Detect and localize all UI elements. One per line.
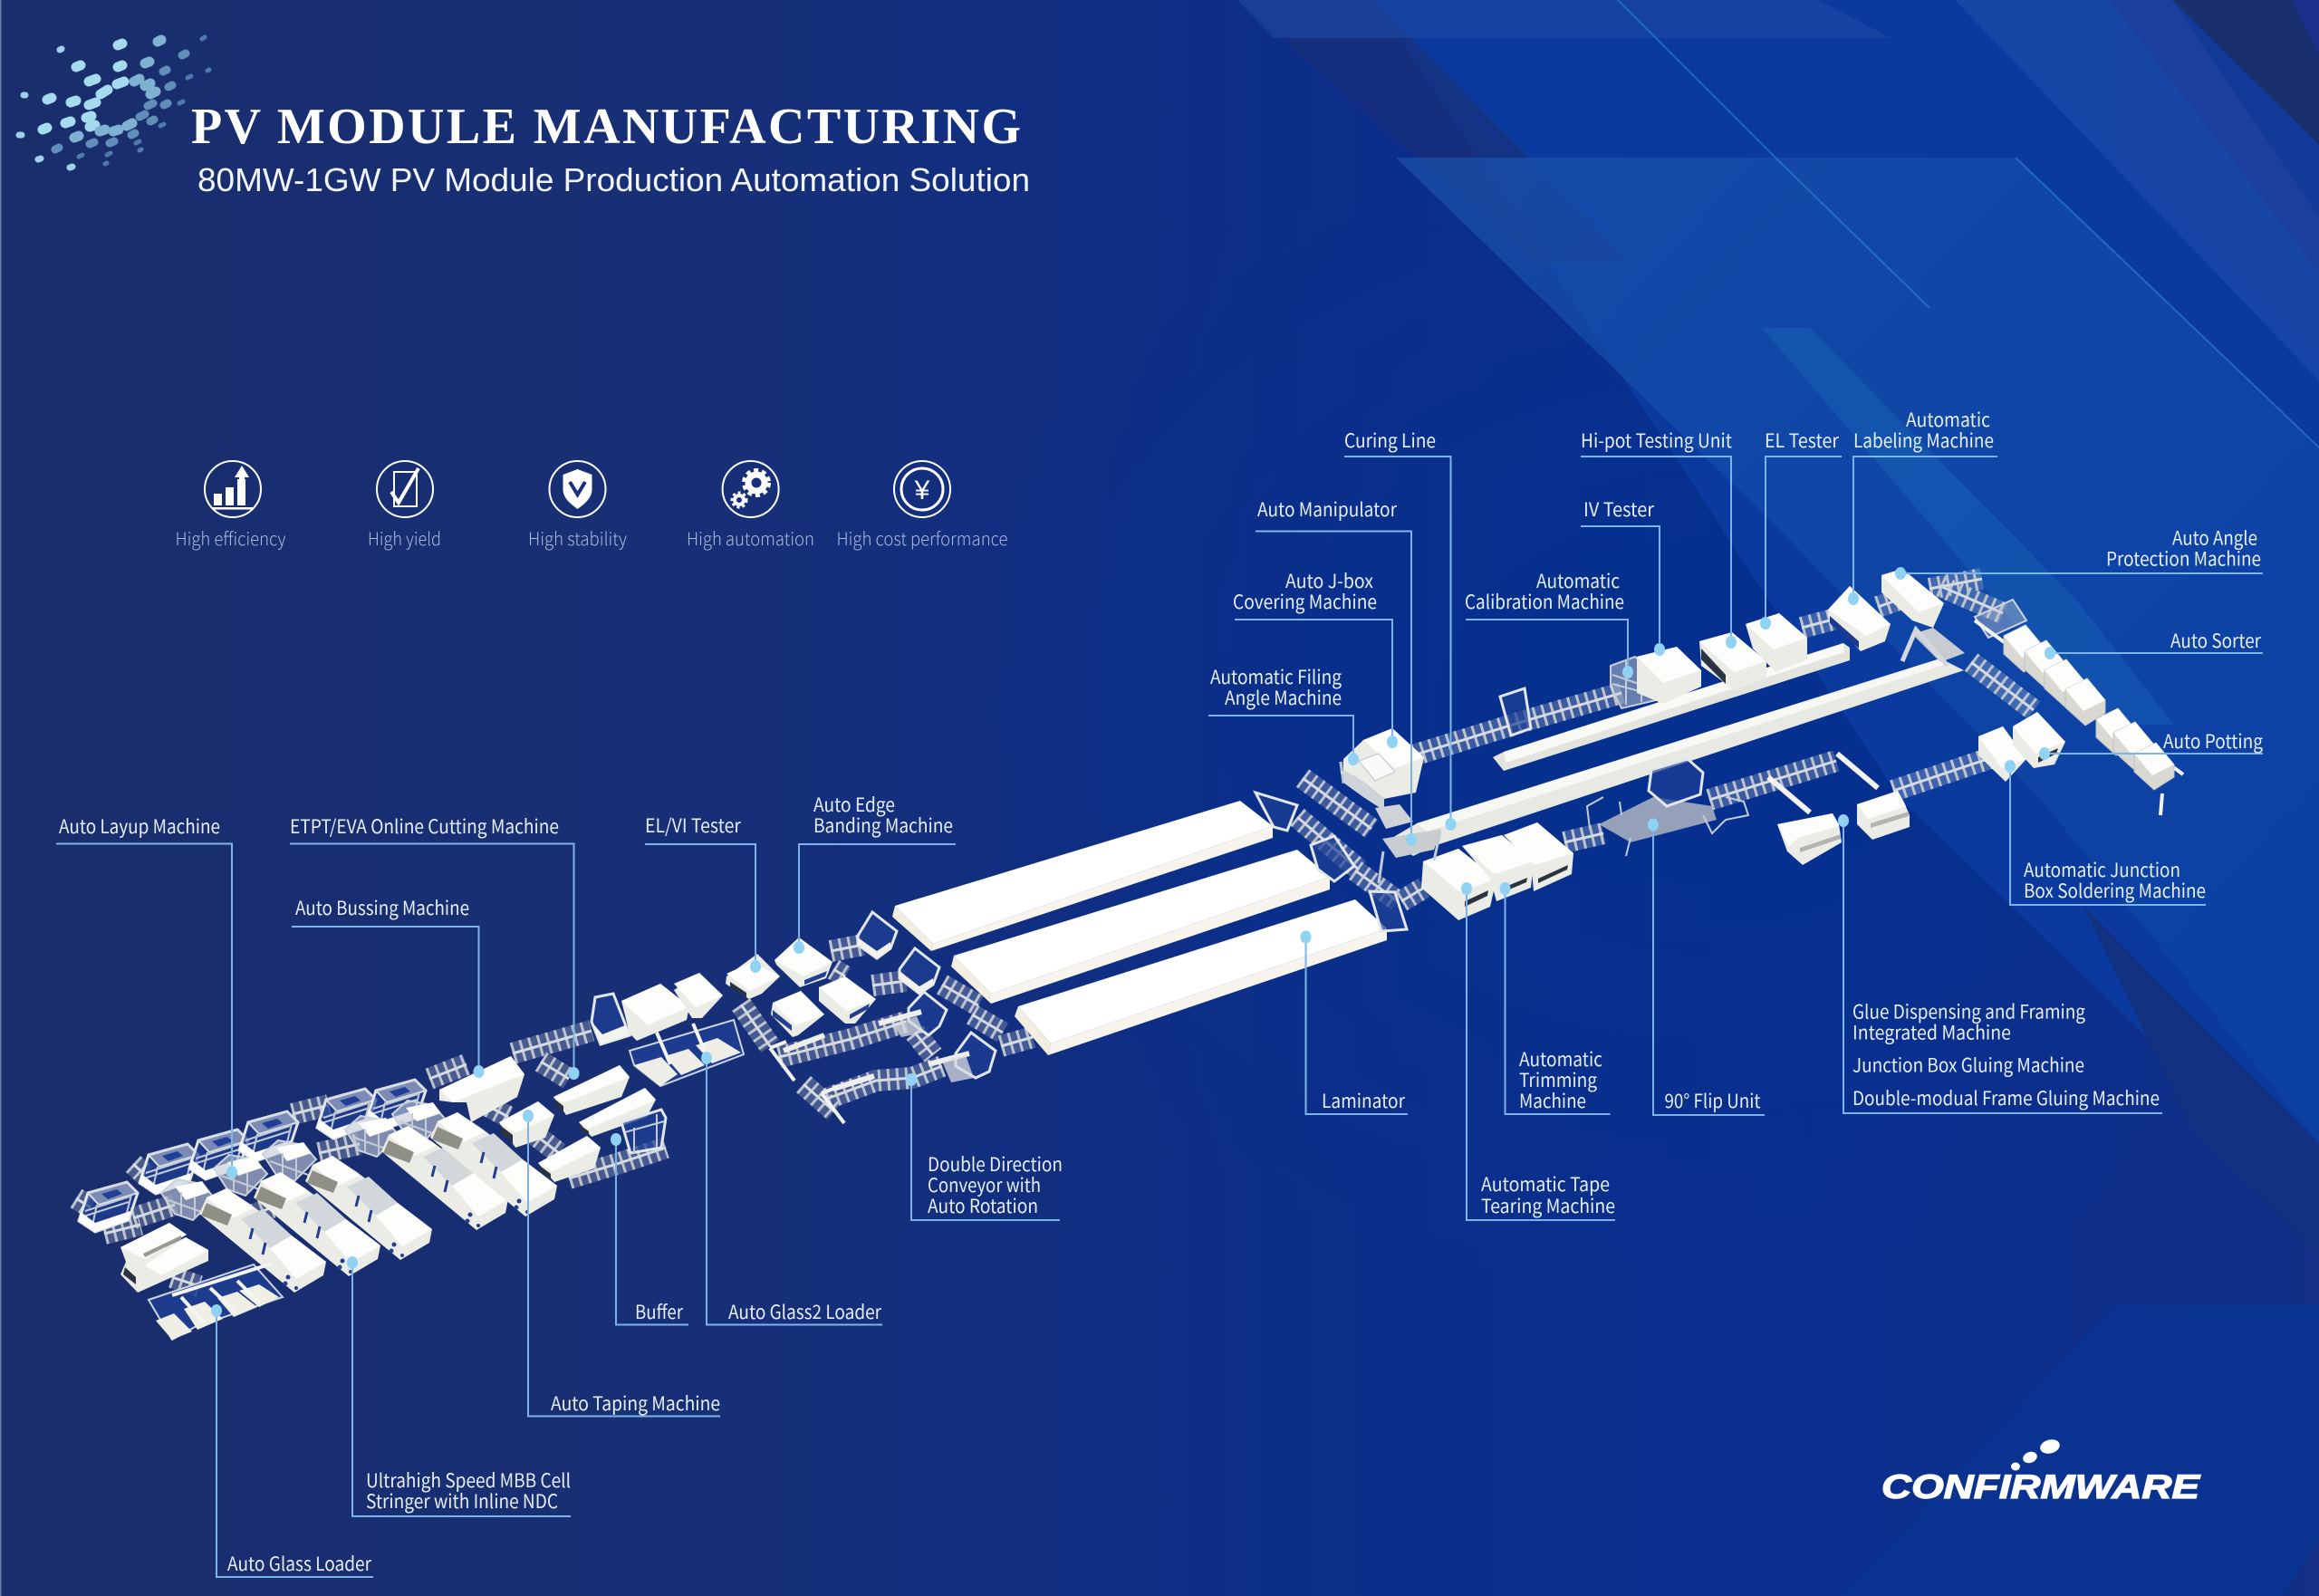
callout: Auto Bussing Machine (292, 894, 484, 1078)
callout: Buffer (611, 1133, 688, 1325)
callout: Ultrahigh Speed MBB Cell Stringer: Stringer with Inline NDC (366, 1487, 558, 1514)
feature: high stability (528, 461, 627, 551)
feature: high efficiency (176, 461, 286, 551)
machines: laminators (892, 793, 1407, 1055)
feature: high automation (687, 461, 814, 551)
callout: Glue dispensing, junction box gluing, double-modual gluing: Integrated Machine (1852, 1018, 2011, 1045)
callout: Auto Layup Machine (56, 812, 237, 1178)
feature: high cost performance: ¥ (914, 476, 930, 505)
callout: Auto Layup Machine: Auto Layup Machine (59, 812, 220, 840)
callout: Automatic Trimming Machine: Machine (1519, 1087, 1586, 1114)
logo: Confirmware: CONFIRMWARE (1881, 1468, 2201, 1505)
machines: cell stringers (199, 1112, 557, 1293)
callout: Auto Taping Machine: Auto Taping Machine (551, 1389, 720, 1417)
machines: filing and J-box covering (1343, 728, 1424, 811)
feature: high automation: High automation (687, 524, 814, 551)
callout: Automatic Labeling Machine: Labeling Machine (1853, 427, 1994, 454)
callout: Curing Line: Curing Line (1344, 427, 1436, 454)
callout: Auto Manipulator (1256, 495, 1417, 846)
callout: Auto Angle Protection Machine: Protection Machine (2106, 545, 2261, 572)
callout: Auto Potting: Auto Potting (2163, 727, 2263, 755)
callout: Double Direction Conveyor with Auto Rotation: Auto Rotation (928, 1192, 1038, 1219)
machines: lower-left loader (120, 1223, 283, 1340)
callout: IV Tester (1581, 495, 1665, 656)
callout: Automatic Filing Angle Machine: Automatic Filing (1210, 663, 1342, 690)
callout: Automatic Tape Tearing Machine: Tearing Machine (1481, 1192, 1615, 1219)
callout: Buffer: Buffer (635, 1298, 684, 1325)
callout: Automatic Filing Angle Machine (1208, 663, 1359, 765)
conveyor lines (76, 579, 2034, 1286)
callout: IV Tester: IV Tester (1583, 495, 1655, 523)
callout: Glue dispensing, junction box gluing, double-modual gluing: Double-modual Frame Gluing Machine (1852, 1084, 2160, 1111)
machines: flip unit and glue framing (1587, 754, 1910, 865)
machines: EL/VI and edge banding group (592, 937, 876, 1086)
callout: EL/VI Tester (645, 812, 761, 973)
callout: Auto Angle Protection Machine (1895, 524, 2263, 580)
callout: Glue dispensing, junction box gluing, double-modual gluing: Junction Box Gluing Machine (1852, 1051, 2084, 1078)
callout: Auto Bussing Machine: Auto Bussing Machine (295, 894, 469, 921)
machines: curing line (1375, 659, 1964, 883)
callout: Automatic Trimming Machine: Automatic (1519, 1045, 1602, 1072)
feature icons row (176, 461, 1007, 551)
machines: tape tearing and trimming (1421, 822, 1573, 920)
callout: Automatic Labeling Machine: Automatic (1906, 406, 1990, 433)
callout: Auto Glass2 Loader: Auto Glass2 Loader (728, 1298, 882, 1325)
callout: Double Direction Conveyor with Auto Rotation: Double Direction (928, 1150, 1063, 1178)
machines: auto sorter row (1975, 600, 2183, 815)
callout: Ultrahigh Speed MBB Cell Stringer (347, 1256, 571, 1516)
callout: Auto Sorter (2045, 627, 2263, 659)
callout: Auto Edge Banding Machine: Auto Edge (813, 791, 895, 818)
callout: Automatic Calibration Machine: Automatic (1536, 567, 1620, 594)
callout: Auto Glass Loader: Auto Glass Loader (227, 1550, 372, 1577)
callout: Automatic Tape Tearing Machine (1461, 882, 1615, 1220)
machines: auto rotation conveyors (770, 912, 996, 1123)
callout: Auto Potting (2039, 727, 2263, 760)
callout: Automatic Trimming Machine: Trimming (1519, 1066, 1597, 1093)
feature: high efficiency: High efficiency (176, 524, 286, 551)
feature: high yield (368, 461, 441, 551)
machines: testing platform (1493, 613, 1850, 771)
callout: Hi-pot Testing Unit (1581, 427, 1737, 649)
feature: high cost performance (837, 461, 1007, 551)
machines: junction box soldering and potting (1978, 712, 2065, 782)
callout: Double Direction Conveyor with Auto Rotation (906, 1073, 1063, 1220)
callout: Auto Angle Protection Machine: Auto Angle (2172, 524, 2257, 551)
title: PV MODULE MANUFACTURING (191, 99, 1021, 155)
callout: Auto Glass2 Loader (701, 1052, 882, 1325)
callout: Automatic Trimming Machine (1500, 882, 1611, 1114)
callout: Automatic Labeling Machine (1848, 406, 1997, 605)
callout: Automatic Junction Box Soldering Machine: Box Soldering Machine (2024, 877, 2206, 904)
callout: Laminator: Laminator (1322, 1087, 1406, 1114)
callout: EL/VI Tester: EL/VI Tester (645, 812, 742, 839)
callout: Automatic Junction Box Soldering Machine: Automatic Junction (2024, 856, 2180, 883)
feature: high yield: High yield (368, 524, 441, 551)
icon: particle swirl logo (19, 37, 209, 168)
machines: labeling and angle protection (1828, 569, 1965, 666)
machines: layup section (79, 1080, 446, 1232)
callout: Auto Sorter: Auto Sorter (2170, 627, 2262, 654)
callout: Automatic Tape Tearing Machine: Automatic Tape (1481, 1170, 1610, 1197)
callout: Auto Edge Banding Machine: Banding Machine (813, 812, 953, 839)
callout: Curing Line (1344, 427, 1457, 831)
callout: Automatic Filing Angle Machine: Angle Machine (1225, 684, 1342, 711)
callout: Automatic Junction Box Soldering Machine (2005, 760, 2206, 905)
feature: high cost performance: High cost performance (837, 524, 1007, 551)
callout: Auto Glass Loader (211, 1304, 373, 1577)
callout: Glue dispensing, junction box gluing, double-modual gluing: Glue Dispensing and Framing (1852, 998, 2085, 1025)
callout: Ultrahigh Speed MBB Cell Stringer: Ultrahigh Speed MBB Cell (366, 1466, 571, 1494)
callout: Laminator (1301, 931, 1408, 1114)
callout: Auto J-box Covering Machine: Covering Machine (1233, 588, 1377, 615)
callout: Hi-pot Testing Unit: Hi-pot Testing Unit (1581, 427, 1732, 454)
callout: 90° Flip Unit (1648, 819, 1765, 1115)
callout: ETPT/EVA Online Cutting Machine (290, 812, 580, 1080)
callout: EL Tester: EL Tester (1765, 427, 1840, 454)
callout: Glue dispensing, junction box gluing, double-modual gluing (1838, 814, 2162, 1113)
callout: Auto J-box Covering Machine (1233, 567, 1398, 748)
callout: 90° Flip Unit: 90° Flip Unit (1665, 1087, 1761, 1114)
callout: EL Tester (1760, 427, 1842, 630)
machines: bussing and taping (439, 1056, 666, 1182)
callout: Automatic Calibration Machine: Calibration Machine (1465, 588, 1624, 615)
feature: high stability: High stability (528, 524, 627, 551)
callout: Auto J-box Covering Machine: Auto J-box (1285, 567, 1373, 594)
subtitle: 80MW-1GW PV Module Production Automation Solution (197, 161, 1030, 198)
callout: Automatic Calibration Machine (1465, 567, 1633, 678)
logo: Confirmware (1881, 1437, 2201, 1505)
callout: Double Direction Conveyor with Auto Rotation: Conveyor with (928, 1171, 1041, 1198)
callout: Auto Edge Banding Machine (794, 791, 956, 954)
callout: Auto Manipulator: Auto Manipulator (1257, 495, 1398, 523)
callout: ETPT/EVA Online Cutting Machine: ETPT/EVA Online Cutting Machine (290, 812, 559, 840)
callout: Auto Taping Machine (523, 1110, 720, 1417)
